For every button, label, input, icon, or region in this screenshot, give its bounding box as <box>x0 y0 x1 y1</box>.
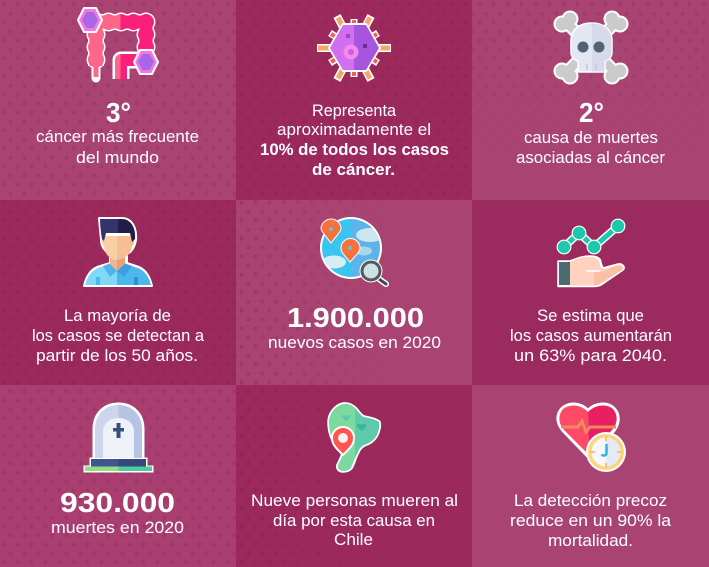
text: nuevos casos en 2020: nuevos casos en 2020 <box>268 333 441 352</box>
text: la detección precoz reduce en un 90% la mortalidad: La detección precoz <box>514 491 667 510</box>
text: se estima que los casos aumentarán un 63% para 2040 <box>510 306 672 365</box>
text: la detección precoz reduce en un 90% la mortalidad: reduce en un 90% la <box>510 511 672 530</box>
icon: célula cancerosa <box>317 16 391 80</box>
icon: mapa de Sudamérica con marcador <box>329 404 379 471</box>
icon: corazón con reloj <box>558 404 626 472</box>
text: la detección precoz reduce en un 90% la mortalidad: mortalidad. <box>548 531 633 550</box>
panel: 1.900.000 nuevos casos <box>236 200 472 385</box>
panel: tercer cáncer más frecuente <box>0 0 236 200</box>
text: la mayoría de los casos se detectan a partir de los 50 años: partir de los 50 años. <box>36 346 198 365</box>
text: nueve personas mueren al día por esta causa en Chile: día por esta causa en <box>273 511 435 530</box>
panel: mayoría desde los 50 años <box>33 217 204 364</box>
text: nueve personas mueren al día por esta causa en Chile: Chile <box>334 530 373 549</box>
icon: globo con marcadores <box>320 217 386 284</box>
text: representa aproximadamente el 10% de todos los casos de cáncer: de cáncer. <box>312 160 395 179</box>
text: representa aproximadamente el 10% de todos los casos de cáncer: 10% de todos los casos <box>260 140 449 159</box>
panel: detección precoz <box>472 385 709 567</box>
text: causa de muertes asociadas al cáncer <box>516 128 665 167</box>
text: cáncer más frecuente del mundo <box>36 127 199 167</box>
stat: 930.000: 930.000 <box>60 487 175 518</box>
text: se estima que los casos aumentarán un 63% para 2040: los casos aumentarán <box>510 326 672 345</box>
panel: representa el 10% <box>261 14 448 175</box>
panel: segunda causa de muertes <box>472 0 709 200</box>
text: representa aproximadamente el 10% de todos los casos de cáncer <box>260 101 449 179</box>
text: causa de muertes asociadas al cáncer: asociadas al cáncer <box>516 148 665 167</box>
stat: 1.900.000: 1.900.000 <box>287 302 424 333</box>
stat: 2°: 2° <box>579 97 604 128</box>
text: la mayoría de los casos se detectan a partir de los 50 años: los casos se detectan a <box>32 326 205 345</box>
panel: aumento de casos para 2040 <box>472 200 709 385</box>
icon: mano con gráfico <box>557 219 625 286</box>
stat: 3°: 3° <box>106 97 131 128</box>
text: la mayoría de los casos se detectan a partir de los 50 años <box>32 306 205 365</box>
text: nueve personas mueren al día por esta causa en Chile <box>251 491 458 549</box>
text: muertes en 2020: muertes en 2020 <box>51 518 184 537</box>
text: se estima que los casos aumentarán un 63% para 2040: Se estima que <box>537 306 644 325</box>
text: representa aproximadamente el 10% de todos los casos de cáncer: Representa <box>312 101 397 120</box>
text: representa aproximadamente el 10% de todos los casos de cáncer: aproximadamente el <box>277 120 431 139</box>
text: cáncer más frecuente del mundo: cáncer más frecuente <box>36 127 199 146</box>
text: causa de muertes asociadas al cáncer: causa de muertes <box>524 128 658 147</box>
panel: 930.000 muertes <box>0 385 236 567</box>
icon: colon <box>78 8 158 79</box>
text: la detección precoz reduce en un 90% la mortalidad <box>510 491 672 550</box>
icon: persona <box>84 218 152 286</box>
text: cáncer más frecuente del mundo: del mundo <box>76 148 159 167</box>
text: nueve personas mueren al día por esta causa en Chile: Nueve personas mueren al <box>251 491 458 510</box>
text: la mayoría de los casos se detectan a partir de los 50 años: La mayoría de <box>64 306 171 325</box>
icon: lápida <box>84 403 153 472</box>
text: se estima que los casos aumentarán un 63% para 2040: un 63% para 2040. <box>514 346 667 365</box>
panel: nueve personas al día en Chile <box>236 385 472 567</box>
icon: calavera <box>554 10 628 84</box>
